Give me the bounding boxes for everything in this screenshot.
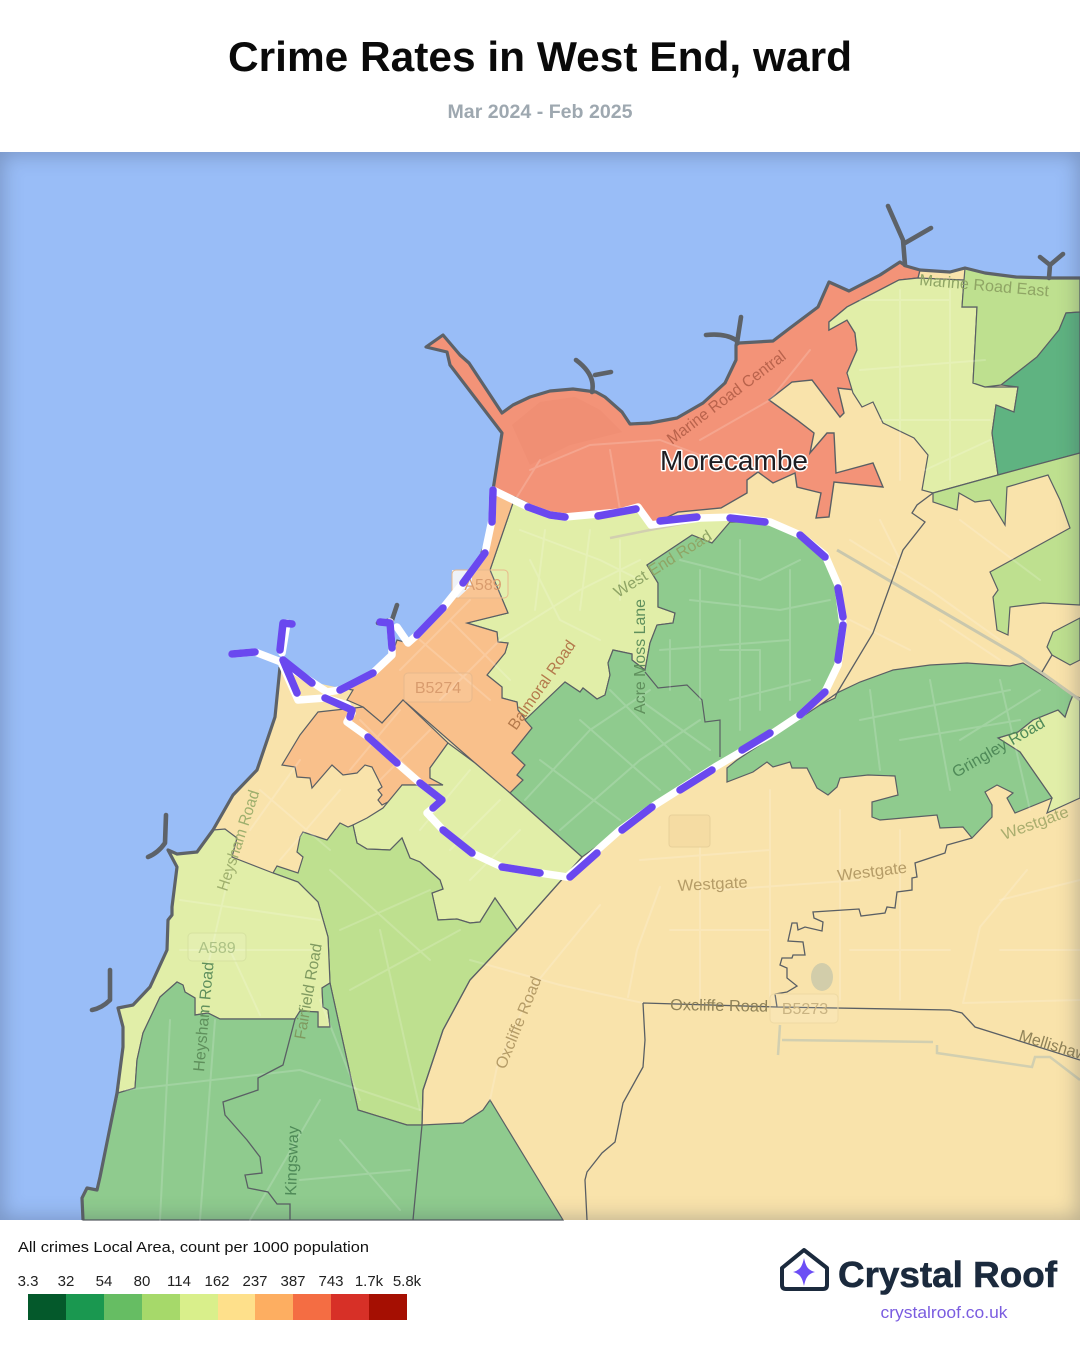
- road labels: Oxcliffe Road: [493, 974, 545, 1071]
- choropleth: red central Morecambe: [426, 262, 920, 525]
- retail block: [669, 815, 710, 847]
- choropleth: mid green east patch: [1047, 618, 1080, 665]
- legend title: All crimes Local Area, count per 1000 population: [18, 1239, 369, 1256]
- railway line: [837, 550, 1080, 700]
- choropleth: light ward south: [353, 743, 582, 930]
- district boundaries: [223, 493, 1080, 1220]
- logo url: crystalroof.co.uk: [880, 1304, 1008, 1322]
- choropleth: mid green east strip: [933, 453, 1080, 635]
- park shading: [512, 397, 622, 465]
- road labels: [191, 272, 1080, 1196]
- road labels: Westgate: [1000, 804, 1071, 844]
- choropleth: light zone Heysham north: [118, 829, 330, 1093]
- subtitle: date range: Mar 2024 - Feb 2025: [448, 102, 633, 123]
- road shield: A589 south: A589: [198, 940, 236, 957]
- road shield: B5274: B5274: [415, 680, 461, 697]
- canal lines: [610, 520, 1080, 1080]
- legend values: 114: [167, 1273, 191, 1290]
- road shield: B5274: [404, 673, 472, 702]
- coastline: [82, 262, 1080, 1220]
- road labels: Marine Road Central: [664, 348, 789, 448]
- road labels: West End Road: [611, 528, 715, 601]
- icon: house with star: [782, 1250, 827, 1289]
- legend values: 1.7k: [355, 1273, 384, 1290]
- road shield: B5273: B5273: [782, 1001, 828, 1018]
- legend values: [18, 1273, 422, 1290]
- road labels: Westgate: [677, 874, 748, 895]
- road labels: Kingsway: [283, 1126, 302, 1196]
- choropleth: dark green east: [992, 312, 1080, 475]
- legend values: 387: [280, 1273, 306, 1290]
- choropleth: mid green far north-east: [962, 268, 1080, 387]
- logo wordmark: Crystal Roof: [838, 1254, 1058, 1295]
- title: Crime Rates in West End, ward: [228, 33, 852, 80]
- roads network: [125, 290, 1080, 1220]
- road shield: B5273: [770, 994, 838, 1023]
- ward boundary: white casing: [232, 490, 843, 877]
- choropleth: light zone West End north: [467, 497, 735, 728]
- piers and breakwaters: [92, 206, 1063, 1010]
- legend values: 54: [96, 1273, 112, 1290]
- road shield: A589 north: A589: [464, 577, 502, 594]
- road shield: A589 south: [188, 933, 246, 961]
- road labels: Balmoral Road: [505, 638, 580, 733]
- map panel: [0, 152, 1080, 1220]
- legend values: 5.8k: [393, 1273, 422, 1290]
- road labels: Oxcliffe Road: [670, 997, 768, 1016]
- choropleth: light zone north-east: [829, 278, 1018, 493]
- legend values: 3.3: [18, 1273, 38, 1290]
- legend colour scale: [28, 1294, 407, 1320]
- pond: [811, 963, 833, 991]
- ward internal boundary: [645, 672, 720, 757]
- road labels: Heysham Road: [215, 788, 263, 893]
- legend values: 237: [242, 1273, 268, 1290]
- legend values: 162: [204, 1273, 230, 1290]
- place label: Morecambe: Morecambe: [660, 445, 808, 476]
- choropleth: peach inland block: [282, 700, 448, 805]
- land base: [82, 262, 1080, 1220]
- choropleth: big green West End: [510, 522, 843, 857]
- legend values: 80: [134, 1273, 150, 1290]
- road labels: Westgate: [836, 860, 908, 885]
- legend: [18, 1239, 422, 1320]
- choropleth: mid green south-west: [273, 823, 517, 1125]
- road labels: Acre Moss Lane: [632, 599, 649, 714]
- map edge vignette: [0, 152, 1080, 1220]
- road labels: Marine Road East: [919, 272, 1050, 300]
- choropleth: peach coastal ward: [340, 490, 532, 793]
- choropleth: Gringley Road green: [727, 663, 1073, 838]
- legend values: 32: [58, 1273, 74, 1290]
- road labels: Fairfield Road: [292, 942, 326, 1041]
- choropleth: green Heysham south: [82, 982, 563, 1220]
- choropleth: light zone south-east: [998, 695, 1080, 813]
- road shield: A589 north: [452, 570, 508, 598]
- road labels: Heysham Road: [191, 961, 218, 1072]
- logo: Crystal Roof: [782, 1250, 1058, 1322]
- road labels: Gringley Road: [950, 715, 1048, 781]
- legend values: 743: [318, 1273, 344, 1290]
- ward boundary: purple dashes: [232, 490, 843, 877]
